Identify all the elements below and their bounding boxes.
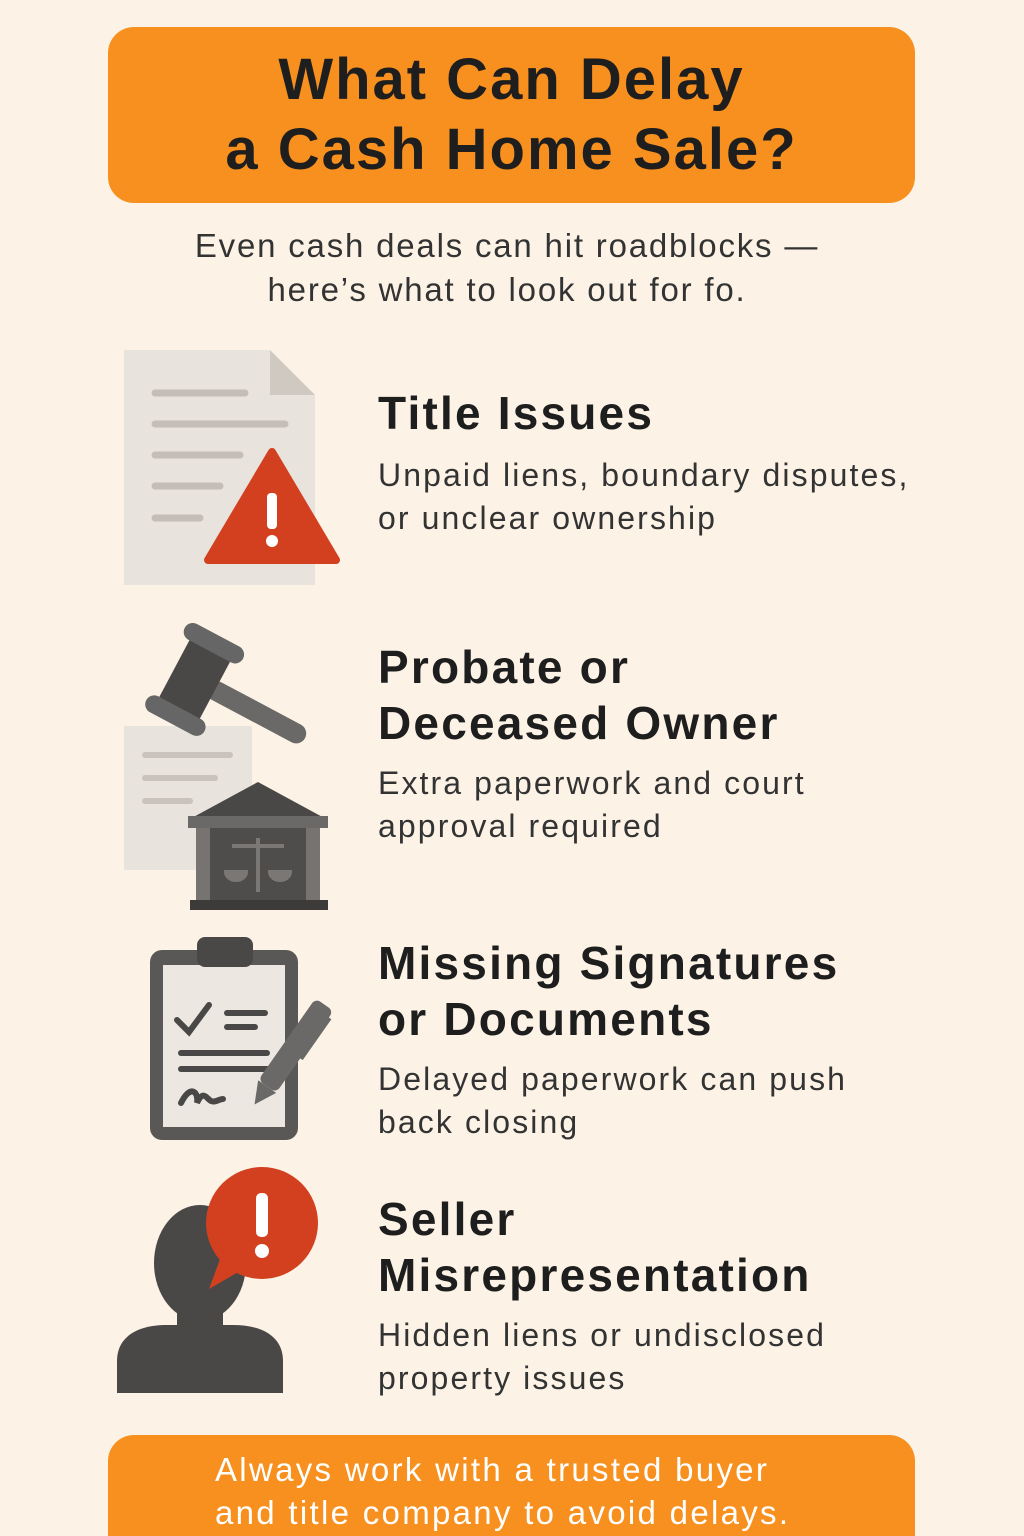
footer banner: and title company to avoid delays. [215,1494,790,1531]
title banner: What Can Delay [278,47,745,112]
desc: title issues: Unpaid liens, boundary disputes, [378,457,910,493]
footer banner [108,1435,915,1536]
desc: title issues: or unclear ownership [378,500,717,536]
desc: seller: property issues [378,1360,626,1396]
heading: missing [378,937,839,1045]
desc: title issues [378,457,910,536]
heading: title issues: Title Issues [378,387,654,439]
desc: probate [378,765,806,844]
heading: probate: Probate or [378,641,630,693]
subtitle: Even cash deals can hit roadblocks — [195,227,819,264]
icon: document with warning [124,350,340,585]
desc: probate: Extra paperwork and court [378,765,806,801]
heading: missing: or Documents [378,993,714,1045]
desc: probate: approval required [378,808,663,844]
subtitle [195,227,819,308]
subtitle: here’s what to look out for fo. [268,271,746,308]
desc: seller: Hidden liens or undisclosed [378,1317,826,1353]
heading: seller [378,1193,812,1301]
heading: missing: Missing Signatures [378,937,839,989]
desc: missing [378,1061,847,1140]
desc: seller [378,1317,826,1396]
icon: person with alert [117,1167,318,1393]
heading: seller: Misrepresentation [378,1249,812,1301]
heading: seller: Seller [378,1193,517,1245]
heading: probate [378,641,780,749]
icon: clipboard with pen [150,937,332,1140]
icon: gavel and courthouse [124,623,328,910]
heading: probate: Deceased Owner [378,697,780,749]
title banner [108,27,915,203]
desc: missing: back closing [378,1104,579,1140]
footer banner: Always work with a trusted buyer [215,1451,769,1488]
desc: missing: Delayed paperwork can push [378,1061,847,1097]
title banner: a Cash Home Sale? [225,117,798,182]
